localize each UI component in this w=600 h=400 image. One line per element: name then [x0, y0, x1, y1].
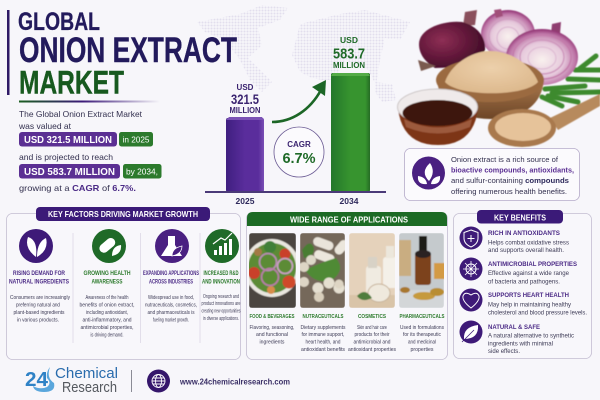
bar 2034: 2034: [340, 196, 359, 206]
application: food and beverages: and functional: [256, 332, 288, 338]
logo: Chemical: [55, 366, 118, 382]
CAGR circle: CAGR: [287, 140, 311, 149]
market summary text: was valued at: [18, 121, 72, 131]
factor: expanding applications: and pharmaceuticals is: [148, 310, 195, 316]
application: cosmetics: antimicrobial and: [354, 340, 391, 346]
factor: health awareness: including antioxidant,: [86, 310, 128, 316]
panel: key factors: [6, 207, 241, 360]
market summary text: USD 583.7 MILLION: [24, 167, 115, 178]
factor: expanding applications: Widespread use in food,: [148, 295, 194, 301]
title: GLOBAL: [18, 8, 100, 36]
bar 2025: 321.5: [231, 91, 259, 107]
application: pharmaceuticals: PHARMACEUTICALS: [400, 314, 445, 320]
application: pharmaceuticals: [399, 233, 445, 353]
market summary text: [18, 109, 162, 193]
heading: key benefits: [477, 210, 563, 224]
factor: research and innovation: Ongoing research and: [203, 294, 239, 300]
panel: applications: [244, 212, 448, 360]
icon: whole red onion: [418, 10, 485, 71]
factor: research and innovation: AND INNOVATION: [202, 280, 240, 286]
panel: key benefits: [454, 210, 592, 358]
market summary text: by 2034,: [126, 168, 158, 176]
bar 2034: 583.7: [333, 46, 365, 62]
logo: 24: [25, 369, 49, 391]
factor: expanding applications: fueling market growth.: [153, 318, 189, 324]
factor: natural ingredients: plant-based ingredients: [14, 310, 65, 316]
factor: research and innovation: in diverse applications.: [203, 316, 239, 322]
application: cosmetics: COSMETICS: [358, 314, 386, 320]
bar chart: [205, 35, 386, 206]
heading: applications: [247, 212, 447, 226]
benefit: natural and safe: side effects.: [488, 349, 520, 355]
bar 2025: MILLION: [230, 106, 261, 115]
benefit: rich in antioxidants: RICH IN ANTIOXIDANTS: [488, 230, 561, 237]
application: food and beverages: Flavoring, seasoning,: [250, 325, 294, 331]
illustration: onions, powder and extract: [398, 9, 600, 147]
logo: Research: [62, 380, 117, 396]
website url: www.24chemicalresearch.com: [179, 378, 290, 386]
factor: research and innovation: [202, 229, 241, 322]
icon: cut onion back: [481, 9, 535, 58]
factor: health awareness: [80, 229, 134, 338]
factor: natural ingredients: preferring natural and: [16, 302, 60, 308]
CAGR circle: 6.7%: [282, 151, 316, 167]
application: cosmetics: antioxidant properties: [348, 347, 396, 353]
application: pharmaceuticals: Used in formulations: [400, 325, 444, 331]
growth arrow: [272, 80, 326, 122]
icon: globe: [147, 370, 170, 392]
icon: cut onion front: [506, 22, 578, 85]
icon: wooden spoon: [488, 94, 600, 147]
footer: [25, 366, 290, 396]
benefit: rich in antioxidants: Helps combat oxidative stress: [488, 240, 569, 246]
application: cosmetics: [348, 233, 397, 353]
heading: applications: WIDE RANGE OF APPLICATIONS: [290, 216, 408, 224]
icon: powder bowl: [436, 51, 544, 119]
bar 2034: MILLION: [333, 61, 365, 70]
heading: key benefits: KEY BENEFITS: [494, 214, 547, 222]
application: cosmetics: Skin and hair care: [357, 325, 387, 331]
title: ONION EXTRACT: [19, 31, 237, 70]
application: pharmaceuticals: and medicinal: [408, 340, 436, 346]
factor: natural ingredients: RISING DEMAND FOR: [13, 271, 66, 277]
factor: natural ingredients: NATURAL INGREDIENTS: [9, 280, 69, 286]
bar 2025: [226, 83, 264, 206]
callout: bioactive compounds: bioactive compounds, antioxidants,: [451, 166, 574, 174]
factor: health awareness: antimicrobial properties,: [80, 325, 134, 331]
factor: expanding applications: nutraceuticals, cosmetics,: [145, 302, 197, 308]
market summary text: and is projected to reach: [19, 152, 113, 162]
benefit: natural and safe: [460, 320, 574, 355]
heading: key factors: [36, 207, 210, 221]
factor: health awareness: is driving demand.: [90, 332, 124, 338]
bar 2025: USD: [237, 83, 254, 92]
benefit: antimicrobial: of bacteria and pathogens.: [488, 280, 560, 286]
benefit: natural and safe: A natural alternative to synthetic: [488, 334, 574, 340]
application: nutraceuticals: for immune support,: [302, 332, 344, 338]
application: nutraceuticals: heart health, and: [306, 340, 341, 346]
factor: natural ingredients: in various products.: [17, 318, 59, 324]
benefit: heart health: SUPPORTS HEART HEALTH: [488, 292, 569, 299]
bar 2025: 2025: [236, 196, 255, 206]
factor: expanding applications: EXPANDING APPLICATIONS: [143, 271, 199, 277]
icon: leaves: [412, 156, 445, 190]
factor: research and innovation: creating new opportunities: [202, 308, 241, 314]
title: [7, 8, 237, 102]
benefit: antimicrobial: [460, 258, 578, 286]
factor: health awareness: Awareness of the health: [86, 295, 129, 301]
application: nutraceuticals: NUTRACEUTICALS: [302, 314, 344, 320]
factor: research and innovation: product innovations are: [202, 301, 241, 307]
market summary text: USD 321.5 MILLION: [24, 135, 112, 146]
callout: bioactive compounds: [404, 148, 580, 200]
factor: research and innovation: INCREASED R&D: [204, 271, 239, 277]
factor: health awareness: benefits of onion extract,: [80, 302, 134, 308]
market summary text: in 2025: [122, 136, 150, 144]
callout: bioactive compounds: offering numerous health benefits.: [451, 187, 567, 196]
benefit: heart health: cholesterol and blood pressure levels.: [488, 310, 587, 316]
application: food and beverages: FOOD & BEVERAGES: [250, 314, 295, 320]
benefit: antimicrobial: Effective against a wide range: [488, 271, 570, 277]
benefit: natural and safe: ingredients with minimal: [488, 342, 553, 348]
icon: glass bowl of extract: [398, 89, 478, 145]
factor: natural ingredients: [9, 229, 70, 324]
callout: bioactive compounds: and sulfur-containing compounds: [451, 176, 569, 185]
icon: green onion leaves: [542, 56, 600, 106]
heading: key factors: KEY FACTORS DRIVING MARKET GROWTH: [48, 210, 198, 219]
factor: health awareness: anti-inflammatory, and: [82, 318, 132, 324]
benefit: rich in antioxidants: and supports overall health.: [488, 248, 564, 254]
factor: expanding applications: ACROSS INDUSTRIES: [149, 280, 193, 286]
world map background: [197, 5, 410, 102]
benefit: rich in antioxidants: [460, 226, 569, 254]
logo: [25, 366, 118, 396]
bar 2034: [331, 35, 370, 206]
application: food and beverages: [249, 233, 296, 344]
market summary text: growing at a CAGR of 6.7%.: [19, 183, 136, 193]
factor: natural ingredients: Consumers are increasingly: [10, 295, 70, 301]
title: MARKET: [19, 64, 124, 100]
application: pharmaceuticals: properties: [410, 347, 434, 353]
application: pharmaceuticals: for its therapeutic: [403, 332, 441, 338]
factor: health awareness: AWARENESS: [92, 280, 122, 286]
callout: bioactive compounds: Onion extract is a rich source of: [451, 155, 559, 164]
benefit: natural and safe: NATURAL & SAFE: [488, 324, 541, 331]
CAGR circle: [274, 127, 324, 177]
application: food and beverages: ingredients: [260, 340, 285, 346]
factor: health awareness: GROWING HEALTH: [84, 271, 130, 277]
benefit: heart health: May help in maintaining healthy: [488, 302, 571, 308]
market summary text: The Global Onion Extract Market: [19, 109, 143, 119]
application: cosmetics: products for their: [354, 332, 390, 338]
bar 2034: USD: [340, 35, 358, 45]
factor: expanding applications: [143, 229, 199, 324]
benefit: antimicrobial: ANTIMICROBIAL PROPERTIES: [488, 261, 578, 268]
application: nutraceuticals: antioxidant benefits: [301, 347, 345, 353]
application: nutraceuticals: Dietary supplements: [300, 325, 346, 331]
application: nutraceuticals: [300, 233, 346, 351]
benefit: heart health: [460, 288, 587, 316]
